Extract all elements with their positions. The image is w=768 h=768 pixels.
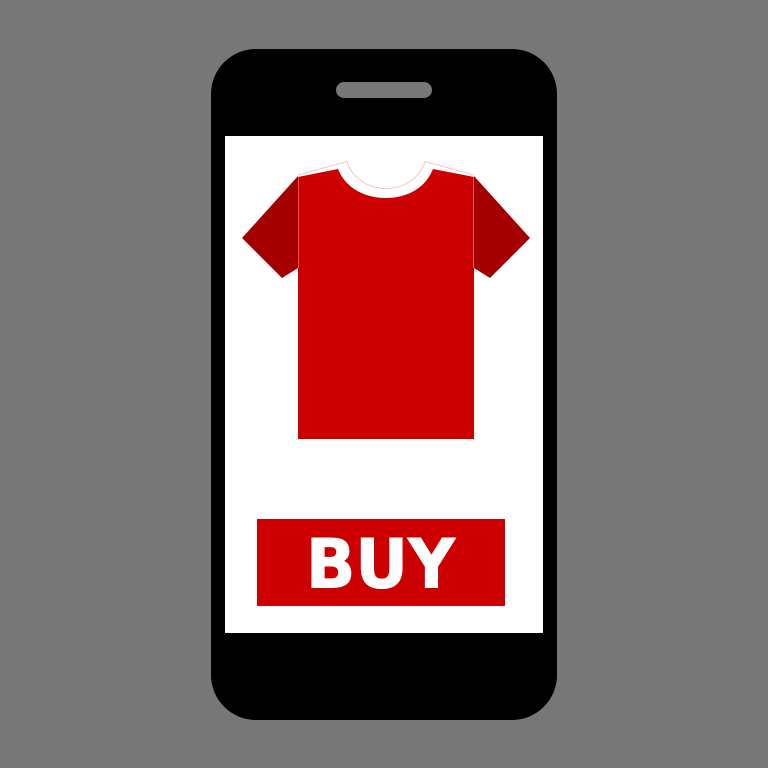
buy button bbox=[257, 519, 505, 606]
icon: red t-shirt bbox=[242, 162, 530, 439]
collar outline bbox=[298, 162, 474, 188]
phone body bbox=[211, 49, 557, 720]
phone speaker bbox=[336, 82, 432, 98]
button label: BUY bbox=[306, 526, 456, 604]
sleeve seams bbox=[298, 177, 474, 268]
right sleeve bbox=[474, 176, 530, 278]
phone screen bbox=[225, 136, 543, 633]
shirt body bbox=[298, 169, 474, 439]
button background bbox=[257, 519, 505, 606]
left sleeve bbox=[242, 176, 298, 278]
